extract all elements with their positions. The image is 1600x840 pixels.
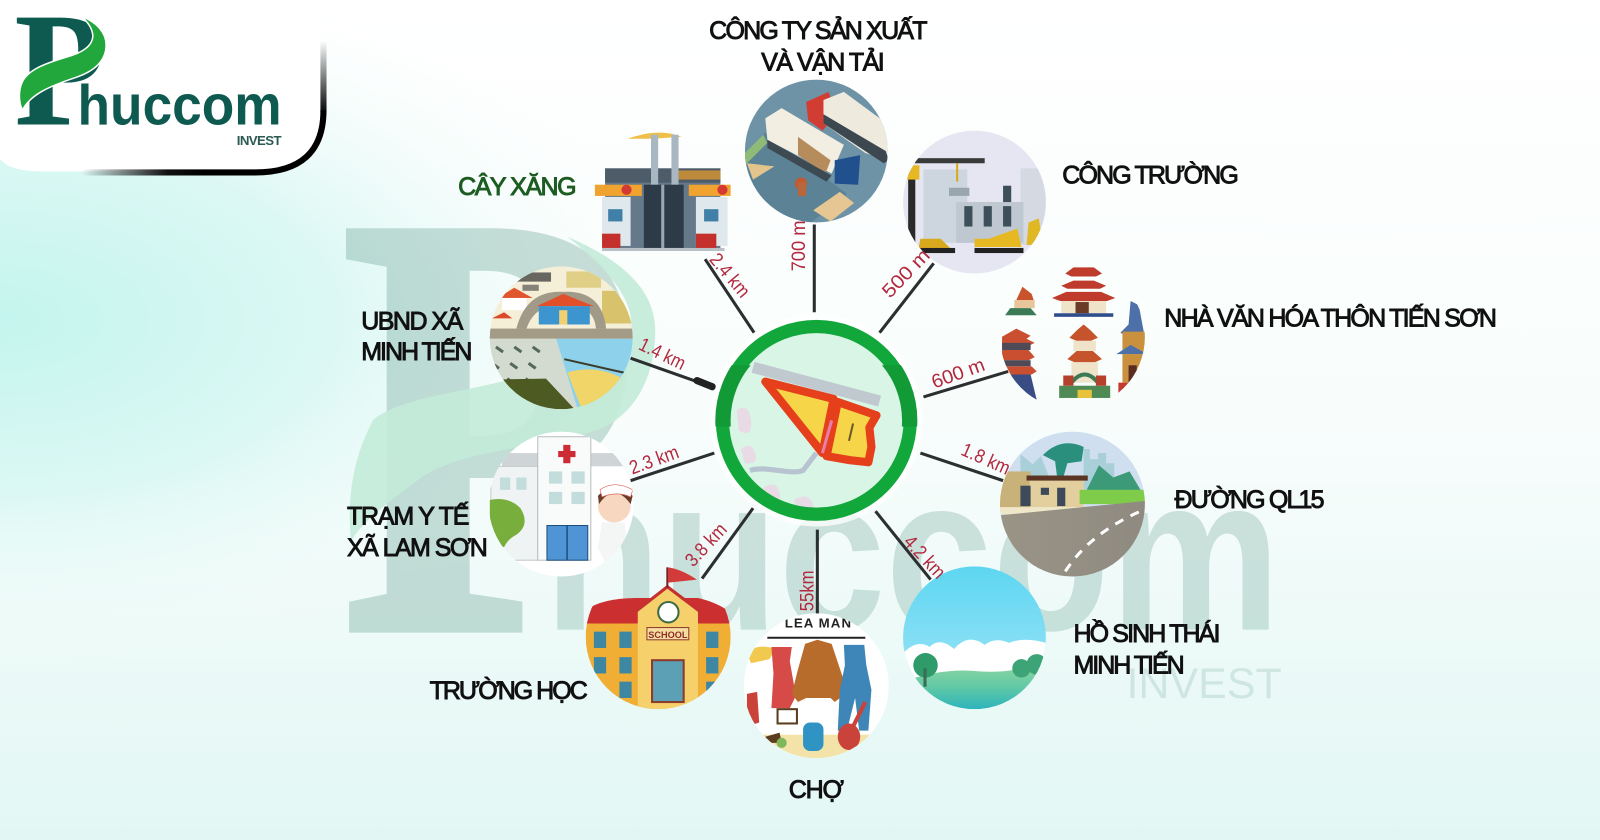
poi: lake (903, 566, 1047, 709)
labels: VÀ VẬN TẢI (761, 46, 885, 76)
land parcels (765, 382, 877, 462)
poi: market (744, 613, 889, 758)
distance labels: 3.8 km (681, 519, 732, 571)
poi: temple (1002, 267, 1147, 400)
poi: petrol station (595, 133, 731, 251)
watermark logo (342, 93, 1282, 759)
logo wordmark: huccom (78, 73, 282, 136)
poi: construction site (903, 131, 1046, 273)
labels: CHỢ (789, 776, 844, 804)
poi: school (586, 587, 731, 709)
watermark logo: huccom (544, 430, 1281, 677)
labels (347, 15, 1497, 804)
labels: MINH TIẾN (361, 337, 472, 366)
poi: commune hall (489, 266, 634, 409)
distance labels: 1.8 km (958, 439, 1013, 480)
poi: school: SCHOOL (648, 630, 688, 640)
watermark logo: P (342, 93, 638, 759)
distance labels: 55km (796, 570, 818, 611)
labels: TRẠM Y TẾ (347, 501, 469, 530)
labels: CÔNG TY SẢN XUẤT (709, 15, 928, 45)
poi: market: LEA MAN (785, 616, 851, 631)
labels: CÂY XĂNG (458, 172, 577, 201)
poi: road (1000, 432, 1147, 577)
distance labels: 2.4 km (705, 249, 754, 302)
distance labels: 500 m (878, 245, 935, 302)
distance labels: 700 m (788, 220, 810, 271)
school flag (666, 567, 697, 588)
distance labels (626, 220, 1013, 611)
logo panel (0, 0, 327, 172)
logo wordmark (14, 0, 282, 160)
distance labels: 2.3 km (626, 441, 682, 479)
labels: XÃ LAM SƠN (347, 533, 488, 562)
labels: UBND XÃ (361, 307, 464, 336)
logo wordmark: INVEST (237, 133, 282, 148)
poi: trucks (745, 80, 891, 222)
labels: NHÀ VĂN HÓA THÔN TIẾN SƠN (1164, 304, 1497, 333)
distance labels: 1.4 km (635, 334, 689, 375)
labels: CÔNG TRƯỜNG (1062, 161, 1239, 190)
labels: HỒ SINH THÁI (1073, 618, 1220, 648)
watermark logo: INVEST (1127, 660, 1282, 708)
centre map circle (710, 314, 922, 527)
poi: clinic (489, 432, 634, 577)
distance labels: 600 m (929, 354, 988, 393)
distance labels: 4.2 km (899, 531, 950, 583)
connector lines (631, 224, 1008, 616)
labels: TRƯỜNG HỌC (430, 676, 588, 705)
labels: MINH TIẾN (1073, 650, 1185, 679)
labels: ĐƯỜNG QL15 (1174, 485, 1324, 514)
